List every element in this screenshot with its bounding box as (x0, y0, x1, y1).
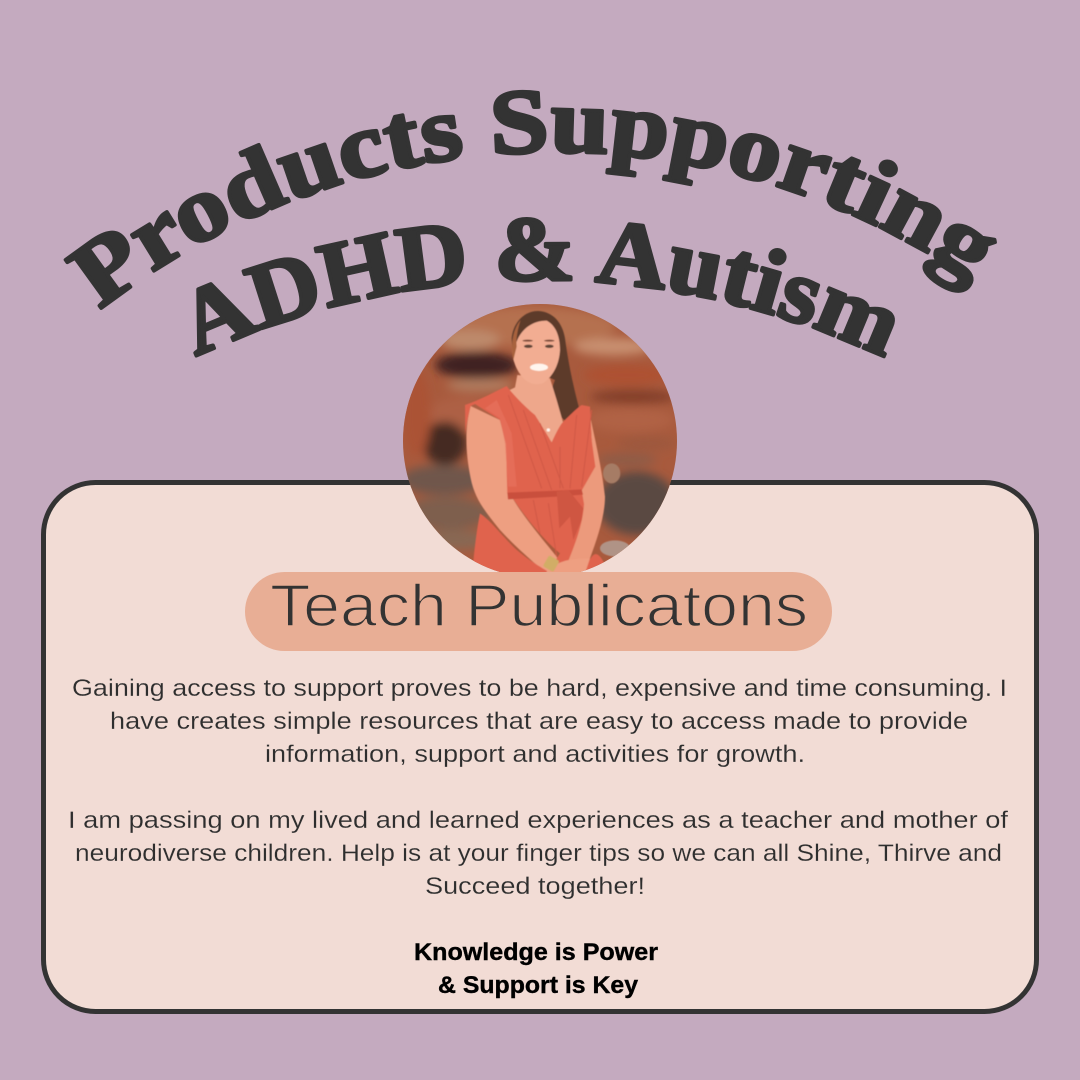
closing statement: Knowledge is Power (414, 939, 658, 966)
hair (511, 310, 579, 420)
hairline (512, 320, 521, 360)
title line 2: ADHD & Autism (193, 217, 895, 358)
face (512, 321, 560, 384)
closing statement (414, 939, 658, 999)
necklace (547, 428, 550, 432)
body paragraph 2: neurodiverse children. Help is at your finger tips so we can all Shine, Thirve and (75, 840, 1002, 867)
hands (546, 558, 590, 572)
mouth (530, 364, 548, 371)
dress pleats (508, 395, 592, 557)
name pill (245, 572, 832, 651)
body paragraph 1: Gaining access to support proves to be hard, expensive and time consuming. I (72, 675, 1007, 702)
photo scene traced in zoom coordinates (400, 300, 680, 580)
watch (543, 555, 560, 572)
dress belt (507, 489, 583, 499)
panel: content card (44, 482, 1036, 1012)
body paragraph 2: I am passing on my lived and learned experiences as a teacher and mother of (68, 807, 1008, 834)
eyes (524, 345, 554, 348)
brows (522, 340, 555, 342)
left arm (466, 406, 563, 572)
dress (465, 386, 605, 577)
closing statement: & Support is Key (438, 972, 638, 999)
rock highlights (600, 463, 630, 556)
pill label: Teach Publicatons (270, 573, 808, 639)
title: curved heading (64, 90, 997, 358)
photo background: rocks (400, 300, 680, 580)
photo: portrait in circle (400, 300, 680, 580)
title line 1: Products Supporting (64, 90, 997, 310)
woman (465, 311, 605, 577)
body paragraph 1: information, support and activities for growth. (265, 741, 805, 768)
body paragraph 2: Succeed together! (425, 873, 645, 900)
body paragraph 1: have creates simple resources that are easy to access made to provide (110, 708, 968, 735)
dress highlight (485, 400, 517, 487)
body paragraph 1 (72, 675, 1007, 768)
body paragraph 2 (68, 807, 1008, 900)
neck and chest (508, 375, 563, 443)
belt tie (557, 496, 583, 538)
right arm (568, 420, 606, 560)
